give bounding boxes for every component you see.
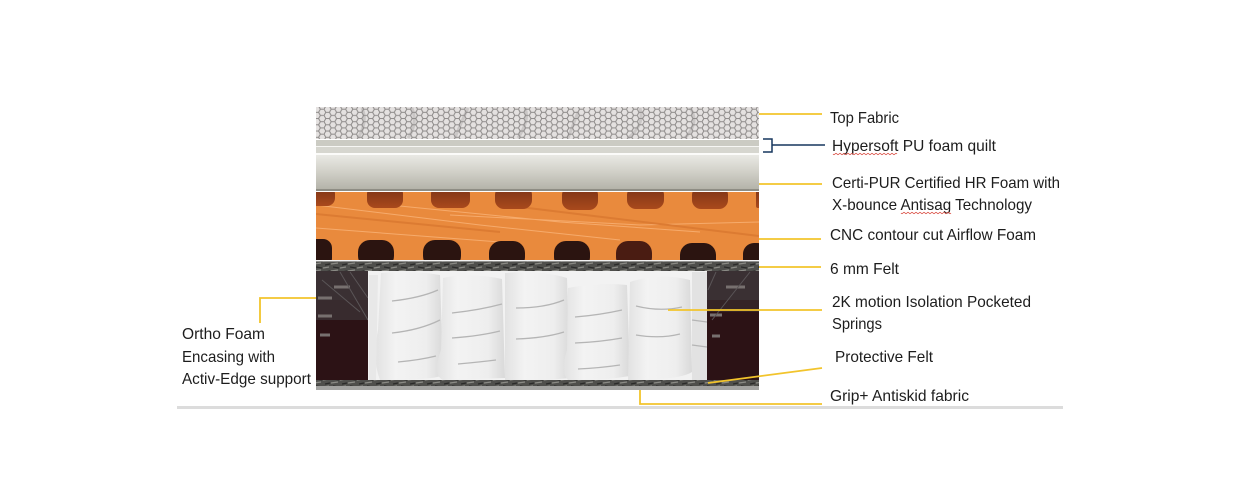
baseline shadow [177, 406, 1063, 409]
label: Hypersoft PU foam quilt: Hypersoft PU foam quilt [832, 138, 997, 155]
label: Ortho Foam Encasing with Activ-Edge support: Activ-Edge support [182, 371, 312, 388]
top notches [316, 192, 759, 210]
label: Top Fabric [759, 110, 899, 127]
label: Protective Felt [708, 349, 934, 383]
label: Grip+ Antiskid fabric: Grip+ Antiskid fabric [830, 388, 969, 405]
label: Top Fabric: Top Fabric [830, 110, 899, 127]
layer: Hypersoft PU foam quilt and HR foam [316, 139, 759, 192]
layer: CNC contour cut airflow foam [316, 192, 759, 260]
label: CNC contour cut Airflow Foam: CNC contour cut Airflow Foam [830, 227, 1036, 244]
layer: ortho foam encasing [316, 271, 759, 381]
layer: 6 mm felt [316, 260, 759, 271]
label: Grip+ Antiskid fabric [640, 388, 969, 405]
label: Certi-PUR Certified HR Foam: Certi-PUR Certified HR Foam with [832, 175, 1060, 192]
label: 6 mm Felt: 6 mm Felt [830, 261, 900, 278]
label: Ortho Foam Encasing with Activ-Edge support: Ortho Foam [182, 326, 265, 343]
label: 2K motion isolation pocketed springs [668, 294, 1031, 333]
bottom notches [316, 239, 759, 260]
label: Certi-PUR Certified HR Foam [759, 175, 1060, 214]
label: 2K motion isolation pocketed springs: 2K motion Isolation Pocketed [832, 294, 1031, 311]
label: Ortho Foam Encasing with Activ-Edge support: Encasing with [182, 349, 275, 366]
label: 2K motion isolation pocketed springs: Springs [832, 316, 882, 333]
label: Certi-PUR Certified HR Foam: X-bounce Antisag Technology [832, 197, 1032, 214]
layer: 2K motion isolation pocketed springs [368, 271, 707, 380]
layer: top fabric [316, 107, 759, 139]
label: Hypersoft PU foam quilt [763, 138, 997, 155]
label: Ortho Foam Encasing with Activ-Edge support [182, 298, 316, 388]
label: Protective Felt: Protective Felt [835, 349, 934, 366]
mattress cross-section infographic [177, 107, 1063, 409]
layer: bottom protective felt and grip fabric [316, 380, 759, 390]
